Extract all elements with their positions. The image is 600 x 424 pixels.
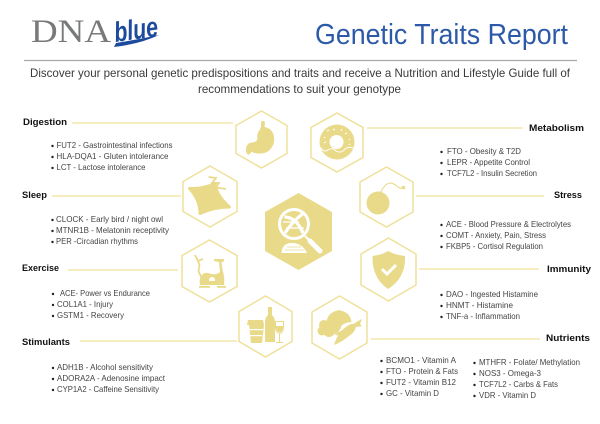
panel: immunity xyxy=(440,264,592,321)
panel: stress xyxy=(440,190,582,251)
list: digestion: HLA-DQA1 - Gluten intolerance xyxy=(56,151,169,161)
heading: nutrients: Nutrients xyxy=(546,333,590,344)
panel: sleep xyxy=(22,190,170,246)
list: stimulants: CYP1A2 - Caffeine Sensitivity xyxy=(57,384,160,394)
list: sleep: MTNR1B - Melatonin receptivity xyxy=(56,225,170,235)
list: metabolism: TCF7L2 - Insulin Secretion xyxy=(447,168,537,178)
icon: bomb hexagon xyxy=(360,167,413,227)
logo: DNAblue: DNA xyxy=(31,14,111,50)
list: stress xyxy=(440,219,571,251)
list: sleep: CLOCK - Early bird / night owl xyxy=(56,214,163,224)
title: Genetic Traits Report xyxy=(315,19,568,51)
list: digestion: FUT2 - Gastrointestinal infections xyxy=(56,140,172,150)
list: sleep: PER -Circadian rhythms xyxy=(56,236,138,246)
list: immunity xyxy=(440,289,538,321)
intro text: recommendations to suit your genotype xyxy=(198,82,401,96)
list: nutrients right: MTHFR - Folate/ Methylation xyxy=(479,357,580,367)
intro text xyxy=(30,66,571,96)
list: nutrients right xyxy=(473,357,580,400)
list: sleep xyxy=(51,214,170,246)
list: nutrients left: FUT2 - Vitamin B12 xyxy=(386,377,456,387)
list: stress: FKBP5 - Cortisol Regulation xyxy=(446,241,543,251)
panel: metabolism xyxy=(440,123,584,178)
heading: immunity: Immunity xyxy=(547,264,592,275)
panel: exercise xyxy=(22,263,150,320)
panel: digestion xyxy=(23,117,172,172)
list: nutrients left: BCMO1 - Vitamin A xyxy=(386,355,456,365)
list: digestion: LCT - Lactose intolerance xyxy=(56,162,146,172)
heading: sleep: Sleep xyxy=(22,190,47,201)
panel: nutrients xyxy=(380,333,590,400)
list: exercise: ACE- Power vs Endurance xyxy=(60,288,150,298)
list: digestion xyxy=(51,140,172,172)
list: stimulants: ADORA2A - Adenosine impact xyxy=(57,373,166,383)
list: nutrients right: VDR - Vitamin D xyxy=(479,390,536,400)
list: metabolism: FTO - Obesity & T2D xyxy=(447,146,521,156)
list: stimulants: ADH1B - Alcohol sensitivity xyxy=(57,362,154,372)
heading: stress: Stress xyxy=(554,190,582,201)
icon: shield hexagon xyxy=(361,238,416,301)
icon: pillow hexagon xyxy=(183,166,237,227)
icon: stomach hexagon xyxy=(236,111,287,168)
icon: bike hexagon xyxy=(182,240,237,302)
list: exercise: COL1A1 - Injury xyxy=(57,299,114,309)
intro text: Discover your personal genetic predispositions and traits and receive a Nutrition and Lifestyle Guide full of xyxy=(30,66,571,80)
icon: central DNA magnifier hexagon xyxy=(265,193,332,270)
panel: stimulants xyxy=(22,337,166,394)
logo: DNAblue xyxy=(31,11,160,50)
list: metabolism: LEPR - Appetite Control xyxy=(447,157,530,167)
list: immunity: DAO - Ingested Histamine xyxy=(446,289,538,299)
list: exercise: GSTM1 - Recovery xyxy=(57,310,125,320)
list: nutrients left: FTO - Protein & Fats xyxy=(386,366,458,376)
list: stress: COMT - Anxiety, Pain, Stress xyxy=(446,230,546,240)
list: immunity: TNF-a - Inflammation xyxy=(446,311,520,321)
heading: exercise: Exercise xyxy=(22,263,59,274)
list: exercise xyxy=(52,288,150,320)
list: nutrients left xyxy=(380,355,458,398)
list: nutrients right: TCF7L2 - Carbs & Fats xyxy=(479,379,558,389)
list: stimulants xyxy=(52,362,166,394)
logo: DNAblue: blue xyxy=(112,11,160,48)
list: metabolism xyxy=(440,146,537,178)
list: immunity: HNMT - Histamine xyxy=(446,300,513,310)
list: stress: ACE - Blood Pressure & Electrolytes xyxy=(446,219,571,229)
list: nutrients right: NOS3 - Omega-3 xyxy=(479,368,541,378)
icon: donut hexagon xyxy=(311,113,363,172)
icon: vegetables hexagon xyxy=(312,296,367,359)
list: nutrients left: GC - Vitamin D xyxy=(386,388,439,398)
heading: digestion: Digestion xyxy=(23,117,67,128)
heading: metabolism: Metabolism xyxy=(529,123,584,134)
icon: drinks hexagon xyxy=(239,296,292,357)
heading: stimulants: Stimulants xyxy=(22,337,70,348)
